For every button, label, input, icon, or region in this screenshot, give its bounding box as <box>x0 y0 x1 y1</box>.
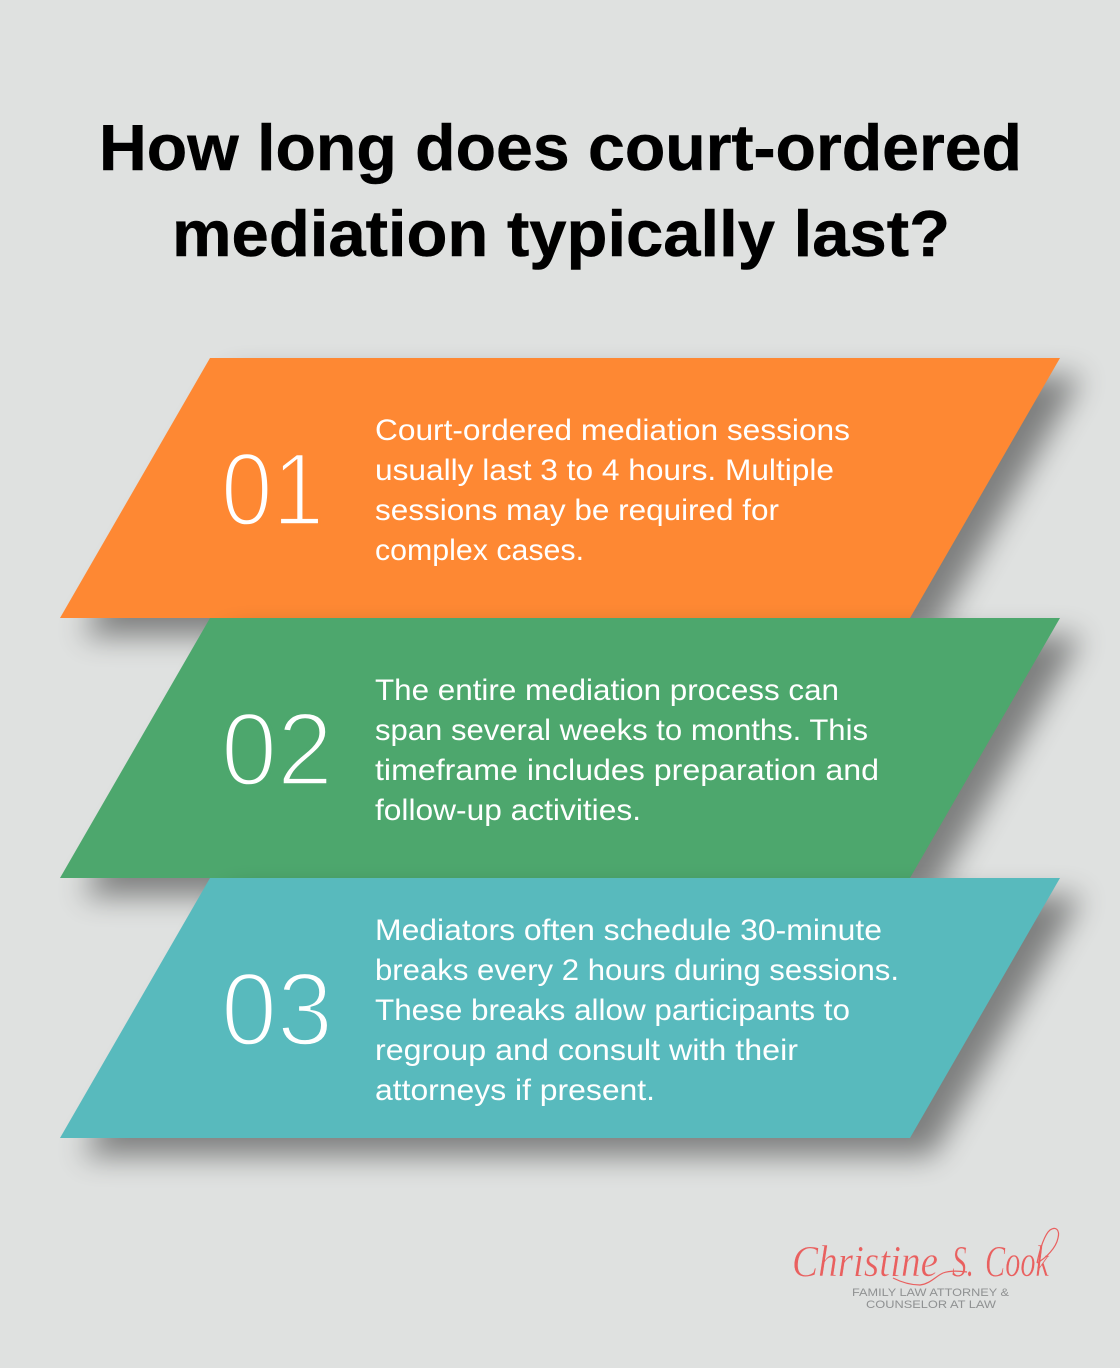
text: step 03 description <box>375 914 899 1107</box>
logo: Christine S. Cook <box>792 1228 1059 1311</box>
text: step 03 description: regroup and consult with their <box>375 1034 798 1067</box>
text: step 02 description <box>375 674 879 827</box>
text: step 03 description: Mediators often schedule 30-minute <box>375 914 882 947</box>
panel: step 02 <box>60 618 1060 878</box>
panel: step 01 <box>60 358 1060 618</box>
text: step 02 description: The entire mediation process can <box>375 674 839 707</box>
title <box>99 111 1022 270</box>
text: step 03 description: attorneys if present. <box>375 1074 655 1107</box>
number 02: 02 <box>221 692 333 808</box>
title: How long does court-ordered <box>99 111 1022 184</box>
logo: Christine S. Cook: FAMILY LAW ATTORNEY & <box>852 1287 1010 1299</box>
text: step 02 description: follow-up activities. <box>375 794 641 827</box>
text: step 02 description: timeframe includes preparation and <box>375 754 879 787</box>
text: step 01 description: sessions may be required for <box>375 494 779 527</box>
logo: Christine S. Cook: Cook <box>985 1237 1050 1286</box>
text: step 01 description: usually last 3 to 4 hours. Multiple <box>375 454 834 487</box>
text: step 01 description: complex cases. <box>375 534 584 567</box>
text: step 01 description: Court-ordered mediation sessions <box>375 414 850 447</box>
panel: step 03 <box>60 878 1060 1138</box>
text: step 03 description: These breaks allow participants to <box>375 994 850 1027</box>
logo: Christine S. Cook: COUNSELOR AT LAW <box>866 1299 997 1311</box>
logo: Christine S. Cook: S. <box>952 1237 974 1286</box>
number 01: 01 <box>221 432 324 548</box>
text: step 03 description: breaks every 2 hours during sessions. <box>375 954 899 987</box>
logo: Christine S. Cook: Christine <box>792 1237 938 1286</box>
text: step 02 description: span several weeks to months. This <box>375 714 868 747</box>
text: step 01 description <box>375 414 850 567</box>
title: mediation typically last? <box>172 197 950 270</box>
number 03: 03 <box>221 952 333 1068</box>
